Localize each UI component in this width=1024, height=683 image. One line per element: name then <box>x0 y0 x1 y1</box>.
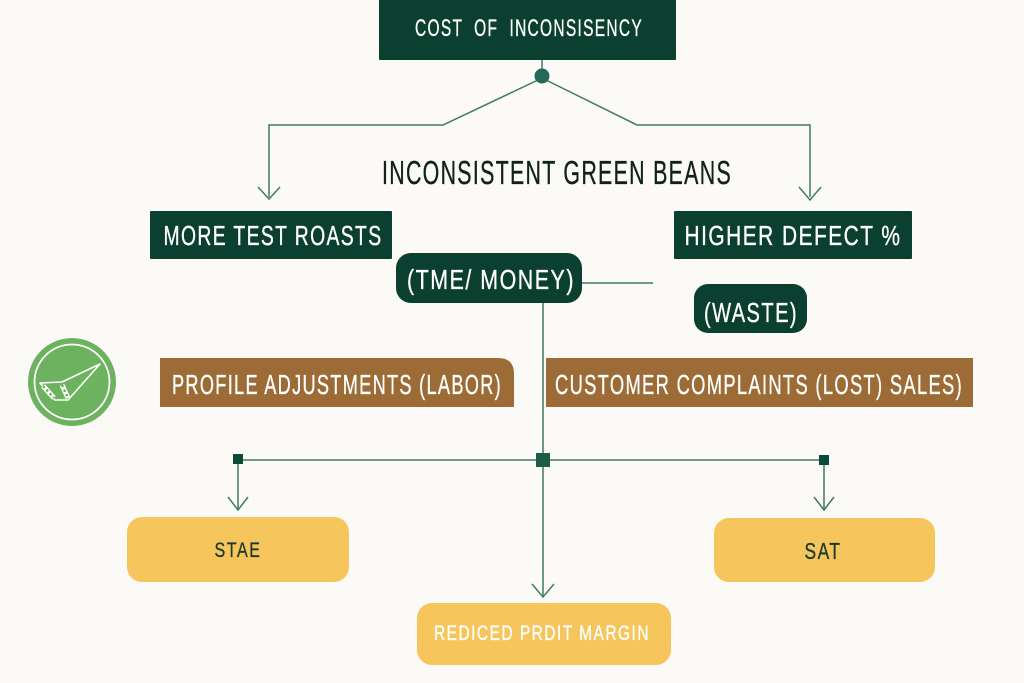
box: state <box>127 517 349 582</box>
pill: waste: (WASTE) <box>704 297 798 328</box>
box: customer complaints <box>546 358 973 407</box>
title box: COST OF INCONSISENCY <box>415 15 643 42</box>
box: reduced profit margin: REDICED PRDIT MARGIN <box>434 622 650 645</box>
pill: time money: (TME/ MONEY) <box>407 264 575 295</box>
box: sat <box>714 518 935 582</box>
subheading: inconsistent green beans: INCONSISTENT GREEN BEANS <box>382 154 732 191</box>
box: sat: SAT <box>804 538 842 564</box>
box: more test roasts <box>150 211 392 259</box>
box: profile adjustments: PROFILE ADJUSTMENTS (LABOR) <box>172 369 502 400</box>
pill: waste <box>694 284 807 333</box>
title box <box>379 0 676 60</box>
box: profile adjustments <box>160 358 514 407</box>
box: more test roasts: MORE TEST ROASTS <box>164 220 382 251</box>
connector: outcomes tree <box>228 453 834 597</box>
box: higher defect percent <box>674 211 912 259</box>
connector node <box>534 68 550 84</box>
box: higher defect percent: HIGHER DEFECT % <box>684 220 902 251</box>
icon: green check badge <box>28 338 116 426</box>
box: reduced profit margin <box>417 603 671 665</box>
pill: time money <box>396 253 582 303</box>
box: state: STAE <box>214 539 262 562</box>
connector: time money to centre junction <box>543 283 653 460</box>
connector: title to left and right branches <box>258 60 821 200</box>
